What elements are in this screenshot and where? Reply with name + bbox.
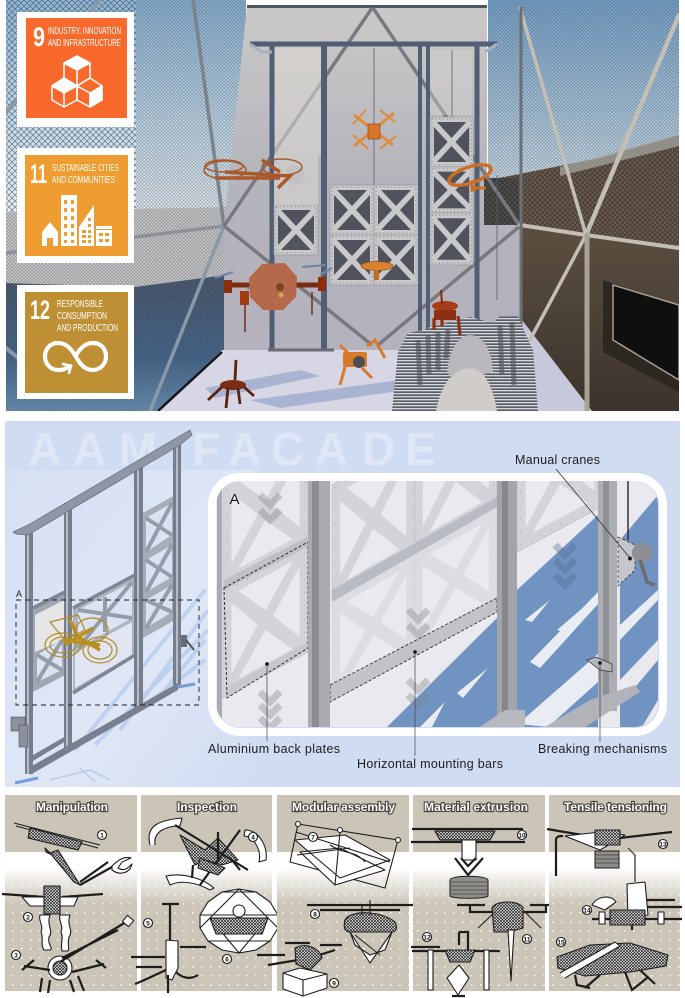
small spider robot bbox=[208, 360, 254, 408]
crank bbox=[181, 635, 194, 650]
SDG card 11 bbox=[17, 148, 134, 263]
SDG 9 number and title: INDUSTRY, INNOVATION bbox=[48, 25, 121, 37]
inset white frame bbox=[212, 477, 663, 732]
drone 11: drill extruder bbox=[457, 902, 560, 981]
heading: inspection: Inspection bbox=[177, 800, 237, 814]
label A small: A bbox=[16, 589, 22, 599]
drone 13: winding drone: 13 bbox=[659, 842, 667, 848]
SDG 12 number and title: 12 bbox=[30, 295, 50, 325]
SDG 9 number and title: 9 bbox=[33, 22, 45, 52]
disc drone upper bbox=[447, 161, 493, 190]
panel: hero render of facade bbox=[6, 0, 679, 411]
large spherical drone bbox=[215, 263, 332, 332]
panel: inspection bbox=[131, 795, 278, 993]
heading: modular assembly: Modular assembly bbox=[292, 800, 395, 814]
chevrons bbox=[260, 495, 575, 728]
icon: infinity loop bbox=[45, 343, 106, 373]
plates bbox=[222, 481, 598, 698]
bottom rails bbox=[30, 683, 178, 775]
SDG card 12 bbox=[17, 285, 134, 399]
breaking mechanism bbox=[587, 657, 612, 672]
heading: material extrusion: Material extrusion bbox=[424, 800, 528, 814]
back plates on frame bbox=[33, 495, 175, 693]
SDG 12 number and title bbox=[30, 295, 118, 334]
right sky mesh bbox=[488, 0, 679, 181]
drone 12: legged extruder: 12 bbox=[423, 934, 431, 942]
SDG card 9 bbox=[17, 12, 134, 127]
building behind mesh bbox=[6, 207, 226, 411]
dashed callout A bbox=[16, 600, 199, 705]
drone 4: caged inspection bbox=[149, 818, 266, 890]
SDG 11 number and title bbox=[30, 159, 119, 189]
isometric aluminium frame bbox=[11, 430, 194, 775]
aluminium x-panels bbox=[274, 117, 473, 285]
label: horizontal mounting bars: Horizontal mounting bars bbox=[357, 757, 503, 771]
drone 9: box carrier bbox=[257, 943, 342, 996]
drone 7: cage modules: 7 bbox=[311, 834, 315, 842]
drone 7: cage modules bbox=[290, 822, 400, 888]
frame ground shadow bbox=[15, 590, 208, 783]
hoop drone bbox=[204, 159, 305, 188]
drone 6: geodesic sphere: 6 bbox=[225, 956, 229, 964]
drone 4: caged inspection: 4 bbox=[251, 834, 255, 842]
SDG 12 number and title: CONSUMPTION bbox=[57, 310, 107, 322]
shadow streaks bbox=[387, 495, 658, 727]
leader: manual cranes bbox=[556, 469, 632, 560]
disc drone lower bbox=[361, 262, 393, 280]
right white struts bbox=[520, 8, 679, 411]
SDG 9 number and title bbox=[33, 22, 121, 52]
drone 12: legged extruder bbox=[411, 932, 500, 996]
manual crane bbox=[618, 481, 655, 586]
control boxes bbox=[11, 717, 28, 747]
drone 11: drill extruder: 11 bbox=[524, 936, 531, 944]
dashed plate outline bbox=[224, 542, 308, 698]
drone 15: lattice frame drone: 15 bbox=[557, 940, 565, 946]
drone 9: box carrier: 9 bbox=[332, 980, 336, 988]
label: aluminium back plates: Aluminium back plates bbox=[208, 742, 340, 756]
drone 6: geodesic sphere bbox=[200, 889, 278, 964]
drone 1: aerial arm: 1 bbox=[100, 832, 104, 840]
drone 2: gripper bbox=[2, 886, 103, 951]
drone 5: mast quadcopter bbox=[131, 904, 206, 993]
drone 10: delta printer bbox=[411, 829, 526, 898]
label A large: A bbox=[230, 491, 240, 508]
leader: horizontal mounting bars bbox=[413, 650, 417, 756]
drone 5: mast quadcopter: 5 bbox=[146, 920, 150, 928]
SDG 12 number and title: RESPONSIBLE bbox=[57, 298, 103, 310]
concrete wall bbox=[224, 5, 520, 350]
dark brown facade wall bbox=[484, 134, 679, 411]
drone 10: delta printer: 10 bbox=[518, 832, 526, 840]
panel: manipulation bbox=[2, 795, 137, 993]
frame columns bbox=[25, 445, 181, 774]
fine light gaps bbox=[420, 590, 658, 727]
SDG 11 number and title: AND COMMUNITIES bbox=[52, 174, 115, 186]
steel frame and beam bbox=[250, 42, 497, 350]
panel: modular assembly bbox=[257, 795, 426, 996]
drone 3: extended arm: 3 bbox=[14, 952, 18, 960]
SDG 12 number and title: AND PRODUCTION bbox=[57, 322, 118, 334]
drone 13: winding drone bbox=[547, 829, 672, 882]
quadruped robot bbox=[340, 340, 385, 385]
drone 8: dome assembly: 8 bbox=[313, 912, 317, 918]
label: breaking mechanisms: Breaking mechanisms bbox=[538, 742, 667, 756]
heading: manipulation: Manipulation bbox=[36, 800, 108, 814]
mesh window opening right bbox=[603, 280, 679, 392]
leader: aluminium back plates bbox=[265, 662, 269, 741]
drone 8: dome assembly bbox=[307, 900, 426, 963]
quad drone bbox=[353, 110, 396, 149]
drone 14: tension tool drone: 14 bbox=[583, 908, 591, 914]
red robot on print bbox=[432, 290, 460, 335]
mounting bars bbox=[224, 497, 497, 702]
SDG 11 number and title: SUSTAINABLE CITIES bbox=[52, 162, 119, 174]
drone 2: gripper: 2 bbox=[26, 914, 30, 922]
drone 1: aerial arm bbox=[14, 823, 132, 885]
SDG 9 number and title: AND INFRASTRUCTURE bbox=[48, 37, 121, 49]
3D printed structure bbox=[392, 316, 538, 411]
floor bbox=[158, 320, 592, 411]
icon: city bbox=[42, 195, 112, 246]
heading: tensile tensioning: Tensile tensioning bbox=[564, 800, 667, 814]
yellow drone bbox=[45, 615, 117, 663]
SDG 11 number and title: 11 bbox=[30, 159, 47, 189]
drone 3: extended arm bbox=[12, 915, 134, 993]
icon: cubes bbox=[52, 56, 102, 107]
label: manual cranes: Manual cranes bbox=[515, 453, 600, 467]
inset detail A bbox=[208, 473, 667, 736]
left steel struts bbox=[6, 0, 224, 411]
drone 15: lattice frame drone bbox=[556, 938, 668, 990]
inset columns bbox=[217, 481, 640, 727]
leader: breaking mechanisms bbox=[598, 661, 602, 742]
top beam bbox=[13, 430, 192, 535]
left sky mesh bbox=[6, 0, 246, 230]
panel: AAM facade diagram bbox=[5, 390, 680, 787]
panel: material extrusion bbox=[411, 795, 560, 996]
drone 14: tension tool drone bbox=[582, 882, 682, 930]
panel: tensile tensioning bbox=[547, 795, 682, 991]
ghost title: AAMFACADE bbox=[28, 423, 436, 475]
